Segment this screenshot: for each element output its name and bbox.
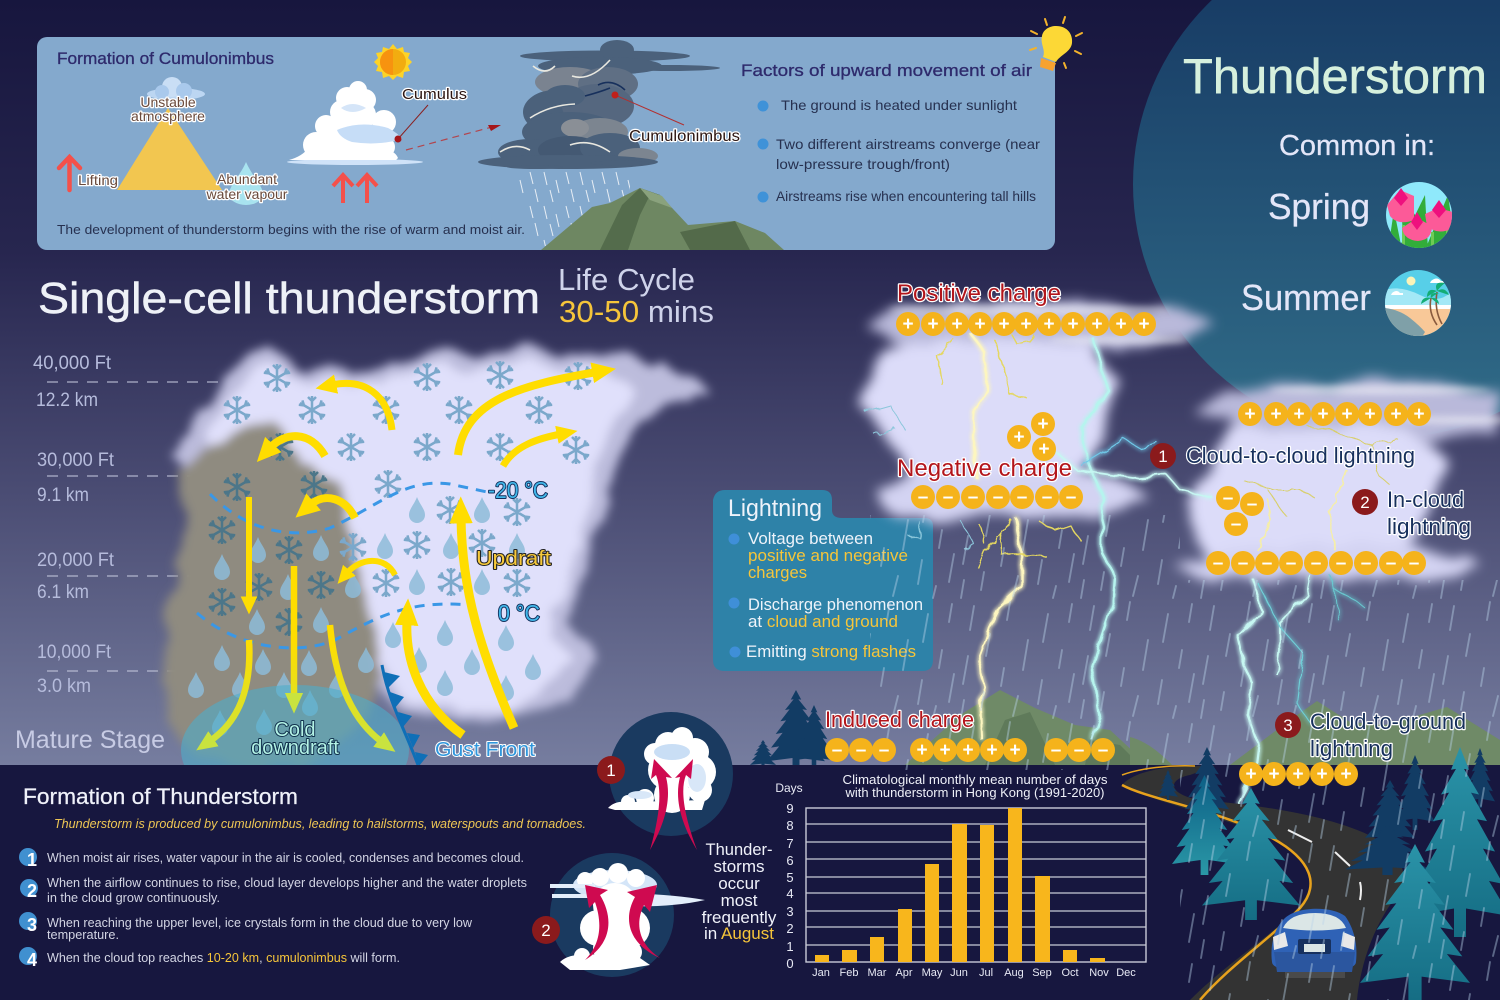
right cell negative row xyxy=(1206,551,1426,575)
chart title: Climatological monthly mean number of days xyxy=(842,772,1108,787)
arrow: updraft pair xyxy=(333,175,377,203)
point 2: Discharge phenomenon xyxy=(748,596,923,614)
step 2 xyxy=(20,876,527,905)
positive charge cluster xyxy=(1007,412,1056,461)
badge 2 xyxy=(1352,489,1378,515)
y axis labels: 4 xyxy=(786,886,794,901)
callout: most frequent month: frequently xyxy=(702,908,777,927)
grid xyxy=(806,808,1146,962)
badge 2 number: 2 xyxy=(1360,493,1370,512)
step 3 xyxy=(19,912,473,942)
callout: most frequent month: Thunder- xyxy=(706,840,772,859)
icon: developing cloud xyxy=(608,727,716,813)
y axis labels: 5 xyxy=(786,870,794,885)
negative charge row: – xyxy=(1066,487,1076,508)
badge 3 xyxy=(1275,712,1301,738)
x axis labels: Jun xyxy=(950,967,968,979)
point 1: positive and negative xyxy=(748,547,908,565)
step 3: 3 xyxy=(27,915,37,935)
triangle xyxy=(117,108,222,190)
altitude scale: 20,000 Ft xyxy=(37,550,115,571)
icon: light bulb xyxy=(1030,17,1082,71)
positive charge row: + xyxy=(902,314,914,335)
label: cold downdraft: Cold xyxy=(274,719,316,741)
step 2: When the airflow continues to rise, cloud layer develops higher and the water droplets xyxy=(47,876,527,890)
lightning bolts xyxy=(865,333,1397,804)
airflow arrows xyxy=(210,372,597,742)
icon: small cloud xyxy=(147,77,205,100)
bolt: cloud to cloud xyxy=(1057,438,1213,498)
label: abundant water vapour: water vapour xyxy=(206,186,288,202)
label: cloud-to-cloud: Cloud-to-cloud lightning xyxy=(1186,443,1415,468)
step 3: When reaching the upper level, ice crystals form in the cloud due to very low xyxy=(47,916,473,930)
label: cloud-to-ground: lightning xyxy=(1310,736,1393,761)
icon: cumulonimbus cloud xyxy=(478,40,720,169)
y axis labels: 2 xyxy=(786,921,794,936)
panel: formation of cumulonimbus xyxy=(37,37,1055,250)
road xyxy=(1122,766,1404,1000)
label: unstable atmosphere: atmosphere xyxy=(131,108,205,124)
right cell negative row: – xyxy=(1286,553,1296,574)
snowflakes on light cloud xyxy=(224,361,591,597)
x axis labels: Mar xyxy=(868,967,887,979)
label: negative charge: Negative charge xyxy=(897,455,1072,482)
induced charge row: + xyxy=(939,740,951,761)
induced charge row: + xyxy=(916,740,928,761)
altitude scale: 3.0 km xyxy=(37,676,91,697)
negative charge row: – xyxy=(943,487,953,508)
y axis labels: 6 xyxy=(786,853,794,868)
clouds: lightning cells xyxy=(858,300,1500,580)
right cell positive row: + xyxy=(1317,404,1329,425)
label: gust front: Gust Front xyxy=(435,739,535,761)
label: -20 C: -20 °C xyxy=(488,477,548,503)
callout: most frequent month: occur xyxy=(718,874,760,893)
negative charge row: – xyxy=(1042,487,1052,508)
positive charge row: + xyxy=(974,314,986,335)
cold downdraft pool xyxy=(181,685,409,765)
arrows: rising air xyxy=(650,759,697,850)
right cell negative cluster: – xyxy=(1223,488,1233,509)
bars xyxy=(815,808,1105,962)
summer label: Summer xyxy=(1241,277,1371,318)
badge 1 xyxy=(1150,443,1176,469)
right cell negative cluster: – xyxy=(1247,494,1257,515)
y axis labels: 8 xyxy=(786,818,794,833)
icon: mountain xyxy=(541,188,784,250)
snow and rain xyxy=(188,361,591,736)
dot xyxy=(612,92,618,98)
positive charge cluster: + xyxy=(1037,414,1049,435)
heading: formation of thunderstorm: Formation of Thunderstorm xyxy=(23,784,298,809)
altitude scale: 12.2 km xyxy=(36,390,98,411)
arrow: dashed development xyxy=(406,125,501,150)
badge: stage 2 xyxy=(532,916,560,944)
right cell positive row xyxy=(1238,402,1431,426)
positive charge row xyxy=(896,312,1156,336)
induced charge row: – xyxy=(1098,740,1108,761)
negative charge row: – xyxy=(968,487,978,508)
step 3: temperature. xyxy=(47,928,119,942)
altitude scale: 30,000 Ft xyxy=(37,450,115,471)
ground positive row xyxy=(1239,762,1358,786)
raindrops xyxy=(188,497,541,736)
positive charge row: + xyxy=(1067,314,1079,335)
icon: summer beach xyxy=(1385,270,1453,340)
positive charge row: + xyxy=(998,314,1010,335)
stage circle 2 xyxy=(550,853,705,977)
badge: stage 1 xyxy=(597,756,625,784)
y axis labels: 0 xyxy=(786,956,794,971)
dot xyxy=(394,136,402,142)
point 1: charges xyxy=(748,564,807,582)
positive charge cluster: + xyxy=(1013,427,1025,448)
italic intro: Thunderstorm is produced by cumulonimbus, leading to hailstorms, waterspouts and tornadoes. xyxy=(54,817,586,831)
x axis labels: Aug xyxy=(1004,967,1024,979)
factor 2: Two different airstreams converge (near xyxy=(776,136,1040,152)
bullets xyxy=(728,534,740,658)
bottom band xyxy=(0,765,1500,1000)
heading: formation of cumulonimbus: Formation of Cumulonimbus xyxy=(57,49,274,68)
right cell positive row: + xyxy=(1270,404,1282,425)
y axis labels: 3 xyxy=(786,904,794,919)
negative charge row: – xyxy=(918,487,928,508)
road markings xyxy=(1122,766,1361,1000)
bolt: yellow branches xyxy=(938,335,1080,568)
anvil streaks xyxy=(890,305,1500,424)
induced charge row: – xyxy=(856,740,866,761)
y axis labels xyxy=(786,801,794,971)
spring label: Spring xyxy=(1268,186,1370,227)
life cycle label: Life Cycle xyxy=(558,262,695,297)
teal pines xyxy=(1172,747,1500,1000)
factor 3: Airstreams rise when encountering tall hills xyxy=(776,188,1036,204)
y axis labels: 7 xyxy=(786,836,794,851)
step 1: 1 xyxy=(27,850,37,870)
badge: stage 2 number: 2 xyxy=(541,921,551,940)
point 3: Emitting strong flashes xyxy=(746,643,916,661)
step 1: When moist air rises, water vapour in the air is cooled, condenses and becomes cloud. xyxy=(47,851,524,865)
right cell positive row: + xyxy=(1244,404,1256,425)
x axis labels: Jan xyxy=(812,967,830,979)
axis title: Days xyxy=(775,781,803,795)
right cell negative cluster: – xyxy=(1231,514,1241,535)
gust front xyxy=(382,665,428,766)
x axis labels: Nov xyxy=(1089,967,1109,979)
positive charge row: + xyxy=(1091,314,1103,335)
background pines left xyxy=(750,690,833,770)
chart title: with thunderstorm in Hong Kong (1991-2020) xyxy=(845,785,1104,800)
right cell positive row: + xyxy=(1390,404,1402,425)
label: positive charge: Positive charge xyxy=(897,280,1061,307)
stage circle 1 xyxy=(608,712,733,850)
panel: lightning definition xyxy=(713,490,933,671)
bolt: yellow main xyxy=(970,333,1022,740)
label: mature stage: Mature Stage xyxy=(15,726,165,754)
negative charge row: – xyxy=(993,487,1003,508)
heading: factors of upward movement: Factors of upward movement of air xyxy=(741,61,1032,80)
negative charge row: – xyxy=(1017,487,1027,508)
callout: most frequent month: storms xyxy=(714,857,764,876)
x axis labels: Dec xyxy=(1116,967,1136,979)
induced charge row: + xyxy=(962,740,974,761)
induced charge row: + xyxy=(986,740,998,761)
positive charge row: + xyxy=(951,314,963,335)
badge: stage 1 number: 1 xyxy=(606,761,616,780)
right cell positive row: + xyxy=(1364,404,1376,425)
x axis labels: Jul xyxy=(979,967,993,979)
heading: single-cell thunderstorm: Single-cell thunderstorm xyxy=(38,274,540,323)
right cell negative row: – xyxy=(1238,553,1248,574)
induced charge row: – xyxy=(1051,740,1061,761)
label: abundant water vapour: Abundant xyxy=(217,171,277,187)
y axis labels: 1 xyxy=(786,939,794,954)
induced charge row: – xyxy=(879,740,889,761)
step 2: in the cloud grow continuously. xyxy=(47,891,220,905)
callout line: cumulonimbus xyxy=(615,95,684,125)
ground positive row: + xyxy=(1316,764,1328,785)
bullets xyxy=(758,100,768,202)
positive charge row: + xyxy=(1138,314,1150,335)
rain under cumulonimbus xyxy=(510,168,632,246)
positive charge cluster: + xyxy=(1038,439,1050,460)
callout: most frequent month: in August xyxy=(704,924,774,943)
factor 2: low-pressure trough/front) xyxy=(776,156,950,172)
panel: mature stage diagram xyxy=(15,345,712,815)
label: 0 C: 0 °C xyxy=(498,600,540,626)
altitude scale: 6.1 km xyxy=(37,582,89,603)
label: updraft: Updraft xyxy=(476,548,551,570)
positive charge row: + xyxy=(927,314,939,335)
ground positive row: + xyxy=(1245,764,1257,785)
callout line: cumulus xyxy=(398,105,428,139)
right cell positive row: + xyxy=(1293,404,1305,425)
icon: sun xyxy=(374,44,412,80)
storm cloud xyxy=(165,345,712,770)
label: induced charge: Induced charge xyxy=(825,707,974,732)
badge 3 number: 3 xyxy=(1283,716,1293,735)
bolt: side branches xyxy=(865,405,975,550)
ground positive row: + xyxy=(1340,764,1352,785)
ground positive row: + xyxy=(1268,764,1280,785)
icon: cumulus cloud xyxy=(287,81,423,165)
right cell negative row: – xyxy=(1386,553,1396,574)
main title: Thunderstorm xyxy=(1183,50,1487,104)
point 2: at cloud and ground xyxy=(748,613,894,631)
positive charge row: + xyxy=(1115,314,1127,335)
label: in-cloud: In-cloud xyxy=(1387,487,1464,512)
bolt: right cloud to ground xyxy=(1237,575,1365,804)
common in label: Common in: xyxy=(1279,130,1435,162)
x axis labels: Feb xyxy=(840,967,858,979)
bar chart: monthly thunderstorm days xyxy=(775,772,1146,979)
life cycle duration: 30-50 mins xyxy=(559,294,714,329)
car xyxy=(1272,909,1357,978)
label: cloud-to-ground: Cloud-to-ground xyxy=(1310,709,1466,734)
right cell negative row: – xyxy=(1262,553,1272,574)
snowflakes on dark cloud xyxy=(209,433,334,636)
positive charge row: + xyxy=(1020,314,1032,335)
step 4: 4 xyxy=(27,950,37,970)
freezing level lines xyxy=(197,483,487,648)
label: cumulus: Cumulus xyxy=(402,86,467,103)
right cell negative row: – xyxy=(1409,553,1419,574)
right cell negative cluster xyxy=(1216,486,1264,536)
right cell negative row: – xyxy=(1361,553,1371,574)
text: development note: The development of thunderstorm begins with the rise of warm and moist air. xyxy=(57,222,525,237)
right cell negative row: – xyxy=(1336,553,1346,574)
induced charge row: + xyxy=(1009,740,1021,761)
label: in-cloud: lightning xyxy=(1387,514,1471,539)
altitude scale xyxy=(33,353,225,697)
heading: lightning: Lightning xyxy=(728,495,822,522)
icon: spring tulips xyxy=(1386,182,1452,248)
right cell positive row: + xyxy=(1413,404,1425,425)
altitude scale: 40,000 Ft xyxy=(33,353,112,374)
step 1 xyxy=(19,848,524,870)
panel: title circle xyxy=(1133,0,1500,438)
induced charge row xyxy=(825,738,1115,762)
step 4: When the cloud top reaches 10-20 km, cumulonimbus will form. xyxy=(47,951,400,965)
icon: mature cloud xyxy=(550,863,705,970)
bolt: right in-cloud xyxy=(1243,426,1397,551)
x axis labels: May xyxy=(922,967,943,979)
right cell positive row: + xyxy=(1341,404,1353,425)
label: cumulonimbus: Cumulonimbus xyxy=(629,128,740,145)
step 2: 2 xyxy=(27,881,37,901)
x axis labels: Oct xyxy=(1061,967,1079,979)
right cell negative row: – xyxy=(1213,553,1223,574)
background hills xyxy=(905,690,1500,765)
positive charge row: + xyxy=(1043,314,1055,335)
rain over road xyxy=(1180,770,1500,1000)
altitude scale: 9.1 km xyxy=(37,485,89,506)
badge 1 number: 1 xyxy=(1158,447,1168,466)
induced charge row: – xyxy=(832,740,842,761)
x axis labels: Apr xyxy=(895,967,913,979)
step 4 xyxy=(19,947,400,970)
icon: water drop xyxy=(229,162,263,205)
callout: most frequent month: most xyxy=(721,891,758,910)
ground positive row: + xyxy=(1292,764,1304,785)
altitude scale: 10,000 Ft xyxy=(37,642,112,663)
label: cold downdraft: downdraft xyxy=(251,737,339,759)
label: unstable atmosphere: Unstable xyxy=(140,94,196,110)
factor 1: The ground is heated under sunlight xyxy=(781,97,1017,113)
negative charge row xyxy=(911,485,1083,509)
right cell negative row: – xyxy=(1311,553,1321,574)
y axis labels: 9 xyxy=(786,801,794,816)
arrow: lifting xyxy=(59,157,80,190)
x axis labels: Sep xyxy=(1032,967,1052,979)
arrows: rising air xyxy=(585,885,660,960)
bolt: cyan main xyxy=(1082,338,1115,740)
rain over storm xyxy=(870,515,1500,770)
label: lifting: Lifting xyxy=(78,172,118,188)
induced charge row: – xyxy=(1074,740,1084,761)
point 1: Voltage between xyxy=(748,530,873,548)
x axis labels xyxy=(812,967,1136,979)
dark pines xyxy=(1158,747,1495,875)
